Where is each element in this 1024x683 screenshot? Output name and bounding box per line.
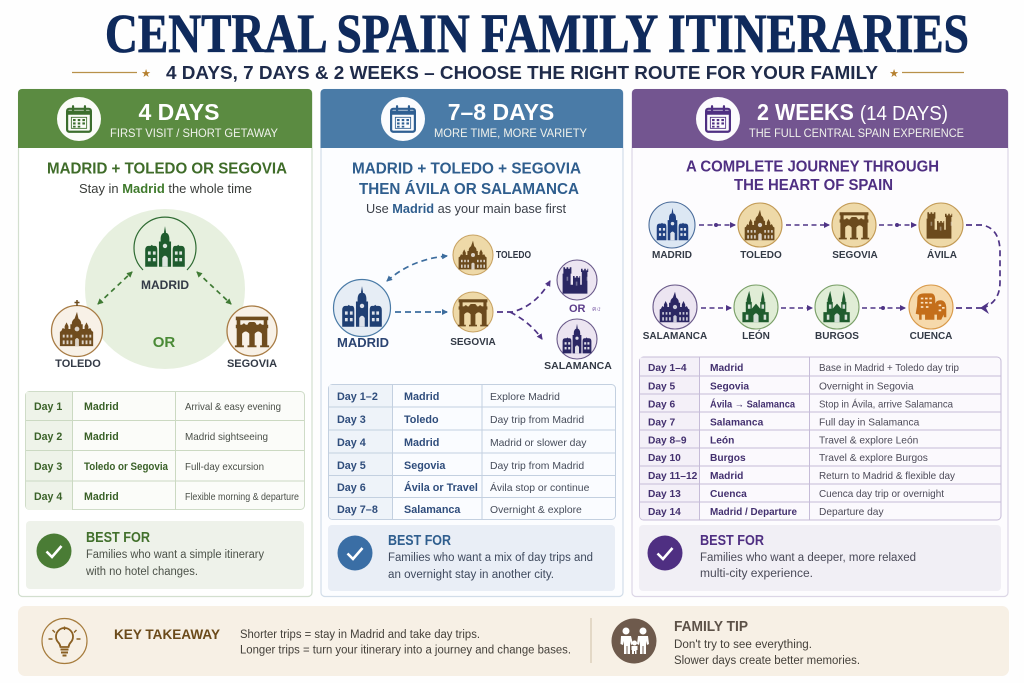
panel: 4 days	[18, 89, 312, 596]
row: day 10	[648, 453, 928, 464]
panel: 2 weeks	[632, 89, 1008, 596]
stop: Toledo	[738, 203, 782, 261]
row: day 2: Day 2	[34, 431, 62, 443]
row: day 10: Day 10	[648, 453, 681, 464]
stop: Madrid	[649, 202, 695, 261]
route heading: THE HEART OF SPAIN	[734, 177, 893, 194]
row: day 14: Day 14	[648, 507, 681, 518]
row: day 5: Segovia	[710, 382, 749, 392]
route diagram: 7-8 days: SEGOVIA	[450, 337, 496, 348]
stop: Leon	[734, 285, 778, 342]
row: day 5: Day 5	[648, 382, 676, 392]
route heading: MADRID + TOLEDO OR SEGOVIA	[47, 160, 287, 178]
route diagram: 4 days	[52, 209, 277, 370]
panel header: 7-8 days: MORE TIME, MORE VARIETY	[434, 126, 587, 140]
route diagram: 7-8 days: MADRID	[337, 335, 389, 350]
row: day 4: Day 4	[34, 491, 62, 503]
icon: light bulb	[42, 618, 87, 664]
row: day 1-2: Explore Madrid	[490, 392, 560, 403]
row: day 1-4: Madrid	[710, 363, 743, 374]
row: day 7-8: Overnight & explore	[490, 505, 582, 516]
itinerary table: 7-8 days	[328, 384, 616, 520]
stop: Cuenca: CUENCA	[910, 331, 952, 342]
best for: 7-8 days: BEST FOR	[388, 533, 451, 549]
route diagram: 4 days: MADRID	[141, 278, 189, 292]
best for: 4 days: Families who want a simple itinerary	[86, 549, 264, 561]
route note: Use Madrid as your main base first	[366, 202, 567, 216]
row: day 3: Day trip from Madrid	[490, 415, 584, 426]
key takeaway heading: KEY TAKEAWAY	[114, 626, 221, 642]
best for: 2 weeks: BEST FOR	[700, 533, 764, 549]
stop: Avila: ÁVILA	[927, 248, 957, 261]
row: day 5	[337, 460, 584, 472]
row: day 5	[648, 382, 914, 392]
row: day 2: Madrid sightseeing	[185, 432, 268, 443]
row: day 1-4	[648, 363, 959, 374]
stop: Salamanca	[643, 285, 707, 342]
panel header: 7-8 days	[320, 89, 623, 148]
route diagram: 4 days: SEGOVIA	[227, 358, 277, 370]
row: day 11-12: Day 11–12	[648, 471, 698, 482]
row: day 1-2: Madrid	[404, 391, 439, 403]
stop: Burgos: BURGOS	[815, 331, 859, 342]
row: day 3: Day 3	[34, 461, 62, 473]
stop: Avila	[919, 203, 963, 261]
stop: Segovia: SEGOVIA	[832, 250, 878, 261]
best for: 2 weeks	[639, 525, 1001, 591]
panel header: 4 days	[18, 89, 312, 148]
row: day 1-2: Day 1–2	[337, 391, 378, 403]
row: day 6: Stop in Ávila, arrive Salamanca	[819, 398, 953, 410]
best for: 7-8 days	[328, 525, 615, 591]
route diagram: 7-8 days: ฅ৫	[592, 306, 601, 313]
row: day 7-8	[337, 504, 582, 516]
row: day 8-9: León	[710, 436, 734, 446]
panel header: 4 days: FIRST VISIT / SHORT GETAWAY	[110, 126, 278, 140]
row: day 1-4: Day 1–4	[648, 363, 687, 374]
row: day 2: Madrid	[84, 431, 119, 443]
row: day 11-12: Return to Madrid & flexible day	[819, 471, 956, 482]
row: day 3	[34, 461, 264, 473]
panel header: 2 weeks: THE FULL CENTRAL SPAIN EXPERIENCE	[749, 126, 964, 140]
row: day 2	[34, 431, 268, 443]
key takeaway text: Longer trips = turn your itinerary into a journey and change bases.	[240, 644, 571, 656]
route diagram: 7-8 days: TOLEDO	[496, 250, 531, 261]
family tip text: Slower days create better memories.	[674, 655, 860, 667]
row: day 3: Toledo	[404, 414, 439, 426]
panel header: 7-8 days: 7–8 DAYS	[448, 99, 554, 125]
row: day 1: Arrival & easy evening	[185, 402, 281, 413]
row: day 3: Day 3	[337, 414, 366, 426]
stop: Leon: LEÓN	[742, 329, 770, 342]
itinerary table: 2 weeks	[640, 357, 1001, 520]
stop: Segovia	[832, 203, 878, 261]
route diagram: 4 days: OR	[153, 334, 175, 351]
panel: 7-8 days	[320, 89, 623, 596]
row: day 5: Day 5	[337, 460, 366, 472]
row: day 13: Cuenca	[710, 489, 747, 500]
row: day 8-9	[648, 436, 918, 446]
subtitle with stars and rules: ★	[141, 68, 151, 80]
row: day 6	[648, 398, 953, 410]
row: day 13: Day 13	[648, 489, 681, 500]
route heading	[352, 160, 581, 198]
route diagram: 7-8 days	[334, 235, 612, 372]
stop: Salamanca: SALAMANCA	[643, 331, 707, 342]
row: day 11-12	[648, 471, 956, 482]
row: day 11-12: Madrid	[710, 471, 743, 482]
row: day 7: Salamanca	[710, 418, 764, 428]
row: day 7	[648, 418, 920, 428]
row: day 6: Day 6	[648, 400, 676, 410]
row: day 14: Madrid / Departure	[710, 507, 797, 518]
row: day 14	[648, 507, 884, 518]
row: day 6: Ávila stop or continue	[490, 481, 590, 494]
row: day 1	[34, 401, 281, 413]
best for: 4 days: with no hotel changes.	[85, 566, 198, 578]
panel header: 2 weeks: 2 WEEKS (14 DAYS)	[757, 99, 948, 125]
best for: 4 days	[26, 521, 304, 589]
key takeaway text: Shorter trips = stay in Madrid and take day trips.	[240, 629, 480, 641]
row: day 5: Overnight in Segovia	[819, 382, 914, 392]
panel header: 2 weeks	[632, 89, 1008, 148]
itinerary table: 4 days	[26, 392, 304, 510]
row: day 1-2	[337, 391, 560, 403]
row: day 1: Day 1	[34, 401, 62, 413]
row: day 4	[34, 491, 299, 503]
row: day 6: Day 6	[337, 482, 366, 494]
row: day 10: Burgos	[710, 453, 746, 464]
family tip heading: FAMILY TIP	[674, 619, 748, 635]
row: day 7: Day 7	[648, 418, 676, 428]
row: day 8-9: Travel & explore León	[819, 436, 918, 446]
row: day 13: Cuenca day trip or overnight	[819, 489, 944, 500]
best for: 4 days: BEST FOR	[86, 530, 150, 546]
row: day 7: Full day in Salamanca	[819, 418, 920, 428]
route heading: MADRID + TOLEDO + SEGOVIA	[352, 160, 581, 178]
row: day 6: Ávila or Travel	[404, 481, 478, 494]
row: day 1: Madrid	[84, 401, 119, 413]
route heading: A COMPLETE JOURNEY THROUGH	[686, 158, 939, 176]
subtitle with stars and rules: ★	[889, 68, 899, 80]
row: day 4: Flexible morning & departure	[185, 492, 299, 503]
stop: Cuenca	[909, 285, 953, 342]
route heading: THEN ÁVILA OR SALAMANCA	[359, 179, 579, 198]
route heading	[686, 158, 939, 194]
row: day 1-4: Base in Madrid + Toledo day trip	[819, 363, 959, 374]
key takeaway text	[240, 629, 571, 656]
row: day 13	[648, 489, 944, 500]
footer band	[18, 606, 1009, 676]
best for: 7-8 days: Families who want a mix of day trips and	[388, 552, 593, 564]
row: day 5: Segovia	[404, 460, 446, 472]
route note: Stay in Madrid the whole time	[79, 181, 252, 196]
row: day 4: Day 4	[337, 437, 366, 449]
family tip text	[674, 639, 860, 667]
route diagram: 7-8 days: OR	[569, 303, 586, 315]
best for: 2 weeks: multi-city experience.	[700, 568, 813, 580]
route diagram: 7-8 days: SALAMANCA	[544, 360, 612, 372]
row: day 3: Toledo or Segovia	[84, 461, 168, 473]
family tip text: Don't try to see everything.	[674, 639, 812, 651]
row: day 14: Departure day	[819, 507, 884, 518]
row: day 4: Madrid or slower day	[490, 438, 587, 449]
panel header: 4 days: 4 DAYS	[139, 99, 219, 125]
stop: Madrid: MADRID	[652, 250, 692, 261]
row: day 6: Ávila → Salamanca	[710, 398, 795, 410]
best for: 7-8 days: an overnight stay in another city.	[388, 569, 554, 581]
row: day 3	[337, 414, 584, 426]
best for: 2 weeks: Families who want a deeper, more relaxed	[700, 552, 916, 564]
row: day 10: Travel & explore Burgos	[819, 453, 928, 464]
route diagram: 4 days: TOLEDO	[55, 358, 101, 370]
row: day 8-9: Day 8–9	[648, 436, 687, 446]
stop: Burgos	[815, 285, 859, 342]
row: day 7-8: Salamanca	[404, 504, 461, 516]
row: day 4: Madrid	[84, 491, 119, 503]
stop: Toledo: TOLEDO	[740, 250, 782, 261]
row: day 3: Full-day excursion	[185, 462, 264, 473]
icon: family	[612, 618, 656, 664]
row: day 5: Day trip from Madrid	[490, 461, 584, 472]
subtitle with stars and rules: 4 DAYS, 7 DAYS & 2 WEEKS – CHOOSE THE RIGHT ROUTE FOR YOUR FAMILY	[166, 63, 878, 83]
route diagram: 2 weeks	[643, 202, 1000, 342]
row: day 4	[337, 437, 587, 449]
row: day 7-8: Day 7–8	[337, 504, 378, 516]
row: day 4: Madrid	[404, 437, 439, 449]
row: day 6	[337, 481, 590, 494]
